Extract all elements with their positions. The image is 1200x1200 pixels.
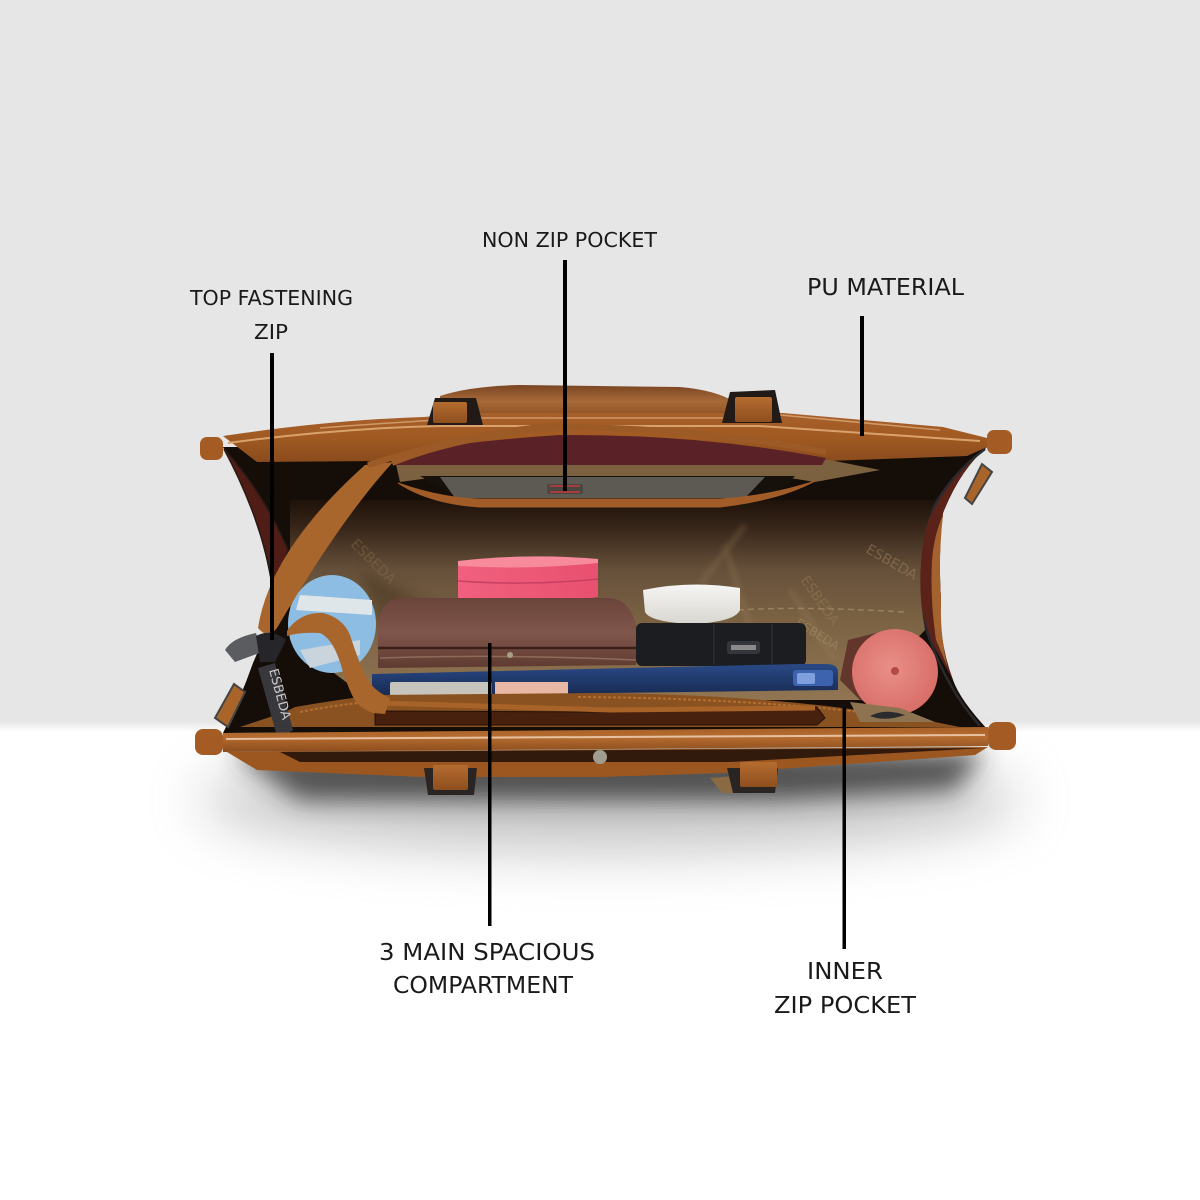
handbag photo illustration [195, 385, 1016, 795]
open zip flap left [258, 462, 393, 634]
left side wall [224, 449, 288, 590]
zip pull tag [225, 633, 293, 740]
front inner zip pocket [240, 693, 960, 727]
non zip pocket [392, 427, 826, 507]
coral bottle cap [840, 629, 938, 715]
back tan lining strip [395, 460, 880, 482]
callout: non zip pocket [482, 228, 658, 491]
callout: inner zip pocket [774, 708, 917, 1019]
white round box [643, 584, 740, 624]
bag interior base [223, 447, 988, 733]
callout: inner zip pocket: ZIP POCKET [774, 993, 917, 1019]
back handle tabs [427, 390, 782, 425]
lining watermark: ESBEDA [797, 573, 842, 629]
curled zip flap [287, 613, 390, 714]
blue water bottle [288, 575, 376, 673]
floor shadow [200, 750, 1020, 850]
back wall rim [223, 413, 987, 462]
brown wallet [378, 598, 636, 668]
callout: inner zip pocket: INNER [807, 959, 883, 985]
front rim [223, 727, 988, 752]
lining watermark: ESBEDA [793, 616, 842, 654]
lining watermark: ESBEDA [863, 542, 920, 584]
callout: PU material: PU MATERIAL [807, 275, 964, 301]
quilted lining [290, 500, 935, 700]
callout: 3 main spacious compartment: COMPARTMENT [393, 973, 574, 999]
lining watermark [347, 537, 920, 654]
zip band rear [368, 425, 565, 465]
callout: non zip pocket: NON ZIP POCKET [482, 228, 658, 252]
callout: top fastening zip: ZIP [254, 320, 288, 344]
background: grey upper wall [0, 0, 1200, 732]
front handle tabs [424, 762, 778, 795]
lining watermark: ESBEDA [347, 537, 399, 588]
callout: top fastening zip [189, 286, 353, 640]
black hard drive [636, 623, 806, 666]
corner studs [195, 430, 1016, 755]
lower front rim [227, 747, 988, 777]
zip pull tag: ESBEDA [265, 667, 293, 722]
side strap tabs [215, 464, 992, 727]
cards in pocket [390, 682, 568, 709]
callout: 3 main spacious compartment: 3 MAIN SPACIOUS [379, 940, 595, 966]
callout: 3 main spacious compartment [379, 643, 595, 999]
pink round case [458, 556, 598, 603]
callout: PU material [807, 275, 964, 436]
blue phone [372, 664, 838, 696]
right side wall [915, 447, 987, 726]
callout: top fastening zip: TOP FASTENING [189, 286, 353, 310]
back handle [440, 385, 735, 418]
background: white surface [0, 732, 1200, 1200]
